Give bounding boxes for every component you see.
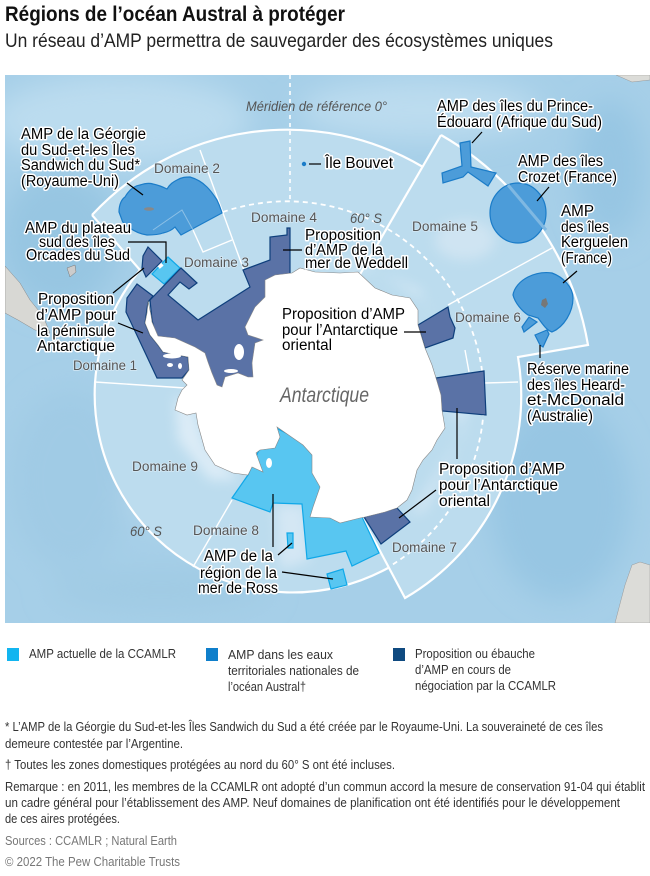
label: South Georgia [21, 126, 146, 190]
legend: proposal MPA: négociation par la CCAMLR [415, 679, 556, 693]
label: Kerguelen: AMP [561, 203, 594, 220]
label: Heard and McDonald: (Australie) [527, 408, 593, 425]
label: South Orkney: Orcades du Sud [26, 247, 130, 264]
shelf notch [157, 263, 164, 269]
label: 60° S upper: 60° S [350, 210, 383, 226]
label: Ross Sea: AMP de la [204, 548, 273, 565]
label: East Antarctica upper: pour l’Antarctique [282, 322, 398, 339]
label: Prince Edward: Édouard (Afrique du Sud) [437, 114, 602, 131]
label: Ross Sea: mer de Ross [198, 580, 278, 597]
label: East Antarctica lower: pour l’Antarctique [439, 477, 558, 494]
label: South Orkney [25, 220, 131, 264]
prime meridian dashed [289, 75, 291, 202]
MPA: Crozet [490, 183, 546, 243]
label: Kerguelen: Kerguelen [561, 234, 628, 251]
domain labels: Domaine 1 [73, 358, 137, 373]
ocean background [0, 75, 650, 623]
label: Kerguelen: (France) [561, 250, 612, 267]
label: Peninsula proposal: Proposition [38, 291, 114, 308]
MPA: Ross Sea region [232, 425, 379, 566]
label: Ross Sea [198, 548, 278, 597]
domain labels: Domaine 7 [392, 540, 457, 555]
leader lines [113, 132, 577, 579]
label: Heard and McDonald: des îles Heard- [527, 377, 625, 394]
label: Weddell proposal: Proposition [305, 227, 381, 244]
ice shelf islands [163, 344, 272, 468]
MPA: Prince Edward [442, 141, 496, 186]
MPA: South Georgia [119, 177, 222, 235]
legend: national waters MPA [206, 648, 359, 694]
Bouvet dot [302, 162, 306, 166]
label: Heard and McDonald [527, 361, 629, 425]
label: prime meridian: Méridien de référence 0° [246, 98, 387, 114]
label: Kerguelen [561, 203, 628, 267]
Antarctica [145, 268, 445, 523]
label: Crozet: AMP des îles [518, 153, 603, 170]
label: Heard and McDonald: et-McDonald [527, 392, 624, 409]
domain labels [73, 161, 521, 555]
inner domain lines over South Georgia MPA [153, 210, 193, 230]
label: Prince Edward: AMP des îles du Prince- [437, 98, 593, 115]
title: Régions de l’océan Austral à protéger [5, 3, 345, 26]
island: South Georgia [144, 207, 154, 211]
domain labels: Domaine 2 [154, 161, 220, 176]
label: East Antarctica lower: Proposition d’AMP [439, 461, 565, 478]
label: Prince Edward [437, 98, 602, 131]
copyright: © 2022 The Pew Charitable Trusts [5, 855, 180, 869]
legend: national waters MPA: territoriales nationales de [228, 664, 359, 678]
proposal: East Antarctica middle [436, 371, 486, 415]
domain labels: Domaine 3 [184, 255, 249, 270]
label: East Antarctica upper [282, 306, 405, 354]
legend: national waters MPA: AMP dans les eaux [228, 648, 334, 662]
label: Peninsula proposal: Antarctique [37, 338, 115, 355]
label: Bouvet: Île Bouvet [324, 155, 394, 172]
proposal: Weddell Sea [150, 228, 290, 395]
domain labels: Domaine 6 [455, 310, 521, 325]
label: Peninsula proposal: d’AMP pour [36, 307, 116, 324]
land: New Zealand [615, 562, 650, 623]
note: un cadre général pour l’établissement des AMP. Neuf domaines de planification ont été identifiés pour le développement [5, 796, 620, 810]
label: East Antarctica lower: oriental [439, 493, 490, 510]
label: Crozet [518, 153, 617, 186]
60° S dashed parallel [223, 201, 484, 565]
label: Kerguelen: des îles [561, 219, 609, 236]
label: Peninsula proposal: la péninsule [37, 323, 115, 340]
label: South Orkney: sud des îles [39, 234, 115, 251]
label: South Georgia: (Royaume-Uni) [21, 173, 119, 190]
MPA: Kerguelen [513, 273, 573, 332]
label: Weddell proposal: d’AMP de la [305, 242, 383, 259]
proposal: Antarctic Peninsula [126, 284, 189, 378]
note [5, 780, 645, 826]
domain labels: Domaine 5 [412, 219, 478, 234]
proposal: East Antarctica lower [364, 508, 410, 544]
footnote: sovereignty: * L’AMP de la Géorgie du Sud-et-les Îles Sandwich du Sud a été créée par le Royaume-Uni. La souveraineté de ces îles [5, 719, 603, 734]
label: East Antarctica lower [439, 461, 565, 510]
label: Heard and McDonald: Réserve marine [527, 361, 629, 378]
label: South Georgia: du Sud-et-les Îles [21, 142, 135, 159]
label: South Orkney: AMP du plateau [25, 220, 131, 237]
label: 60° S lower: 60° S [130, 523, 163, 539]
MPA: Heard and McDonald [535, 330, 549, 347]
legend: national waters MPA: l’océan Austral† [228, 680, 306, 694]
legend: proposal MPA: Proposition ou ébauche [415, 647, 535, 661]
map [0, 75, 650, 623]
label: Weddell proposal: mer de Weddell [305, 255, 408, 272]
label: Weddell proposal [305, 227, 408, 272]
MPA: Ross Sea lower box [327, 569, 347, 589]
footnote: sovereignty: demeure contestée par l’Argentine. [5, 737, 183, 751]
sources: Sources : CCAMLR ; Natural Earth [5, 834, 177, 848]
MPA: Ross Sea small box [287, 533, 293, 548]
legend: proposal MPA [393, 647, 556, 693]
proposal: Orkney part [142, 247, 162, 277]
footnote: dagger: † Toutes les zones domestiques protégées au nord du 60° S ont été incluses. [5, 758, 395, 772]
label: South Georgia: Sandwich du Sud* [21, 157, 140, 174]
legend: current CCAMLR MPA: AMP actuelle de la CCAMLR [29, 647, 176, 661]
domain boundaries [92, 75, 588, 598]
label: South Georgia: AMP de la Géorgie [21, 126, 146, 143]
MPA: South Orkney shelf [152, 257, 180, 284]
label: Peninsula proposal [36, 291, 116, 355]
domain labels: Domaine 8 [193, 523, 259, 538]
planning domains area [92, 130, 588, 598]
domain labels: Domaine 4 [251, 210, 317, 225]
legend: proposal MPA: d’AMP en cours de [415, 663, 511, 677]
land: Africa [616, 75, 650, 82]
label: Crozet: Crozet (France) [518, 169, 617, 186]
MPA: Kerguelen fragment [522, 317, 537, 332]
note: de ces aires protégées. [5, 812, 120, 826]
land: Falklands [67, 265, 76, 277]
label: Antarctique: Antarctique [278, 384, 369, 407]
Crozet band [508, 185, 546, 230]
label: Ross Sea: région de la [200, 565, 277, 582]
shelf highlights [175, 220, 495, 570]
label: East Antarctica upper: Proposition d’AMP [282, 306, 405, 323]
proposal: East Antarctica upper [418, 307, 455, 348]
label: East Antarctica upper: oriental [282, 337, 332, 354]
subtitle: Un réseau d’AMP permettra de sauvegarder des écosystèmes uniques [5, 30, 553, 52]
footnote: sovereignty [5, 719, 603, 751]
island: Kerguelen [541, 298, 548, 308]
land: South America [5, 266, 50, 333]
domain labels: Domaine 9 [132, 459, 198, 474]
